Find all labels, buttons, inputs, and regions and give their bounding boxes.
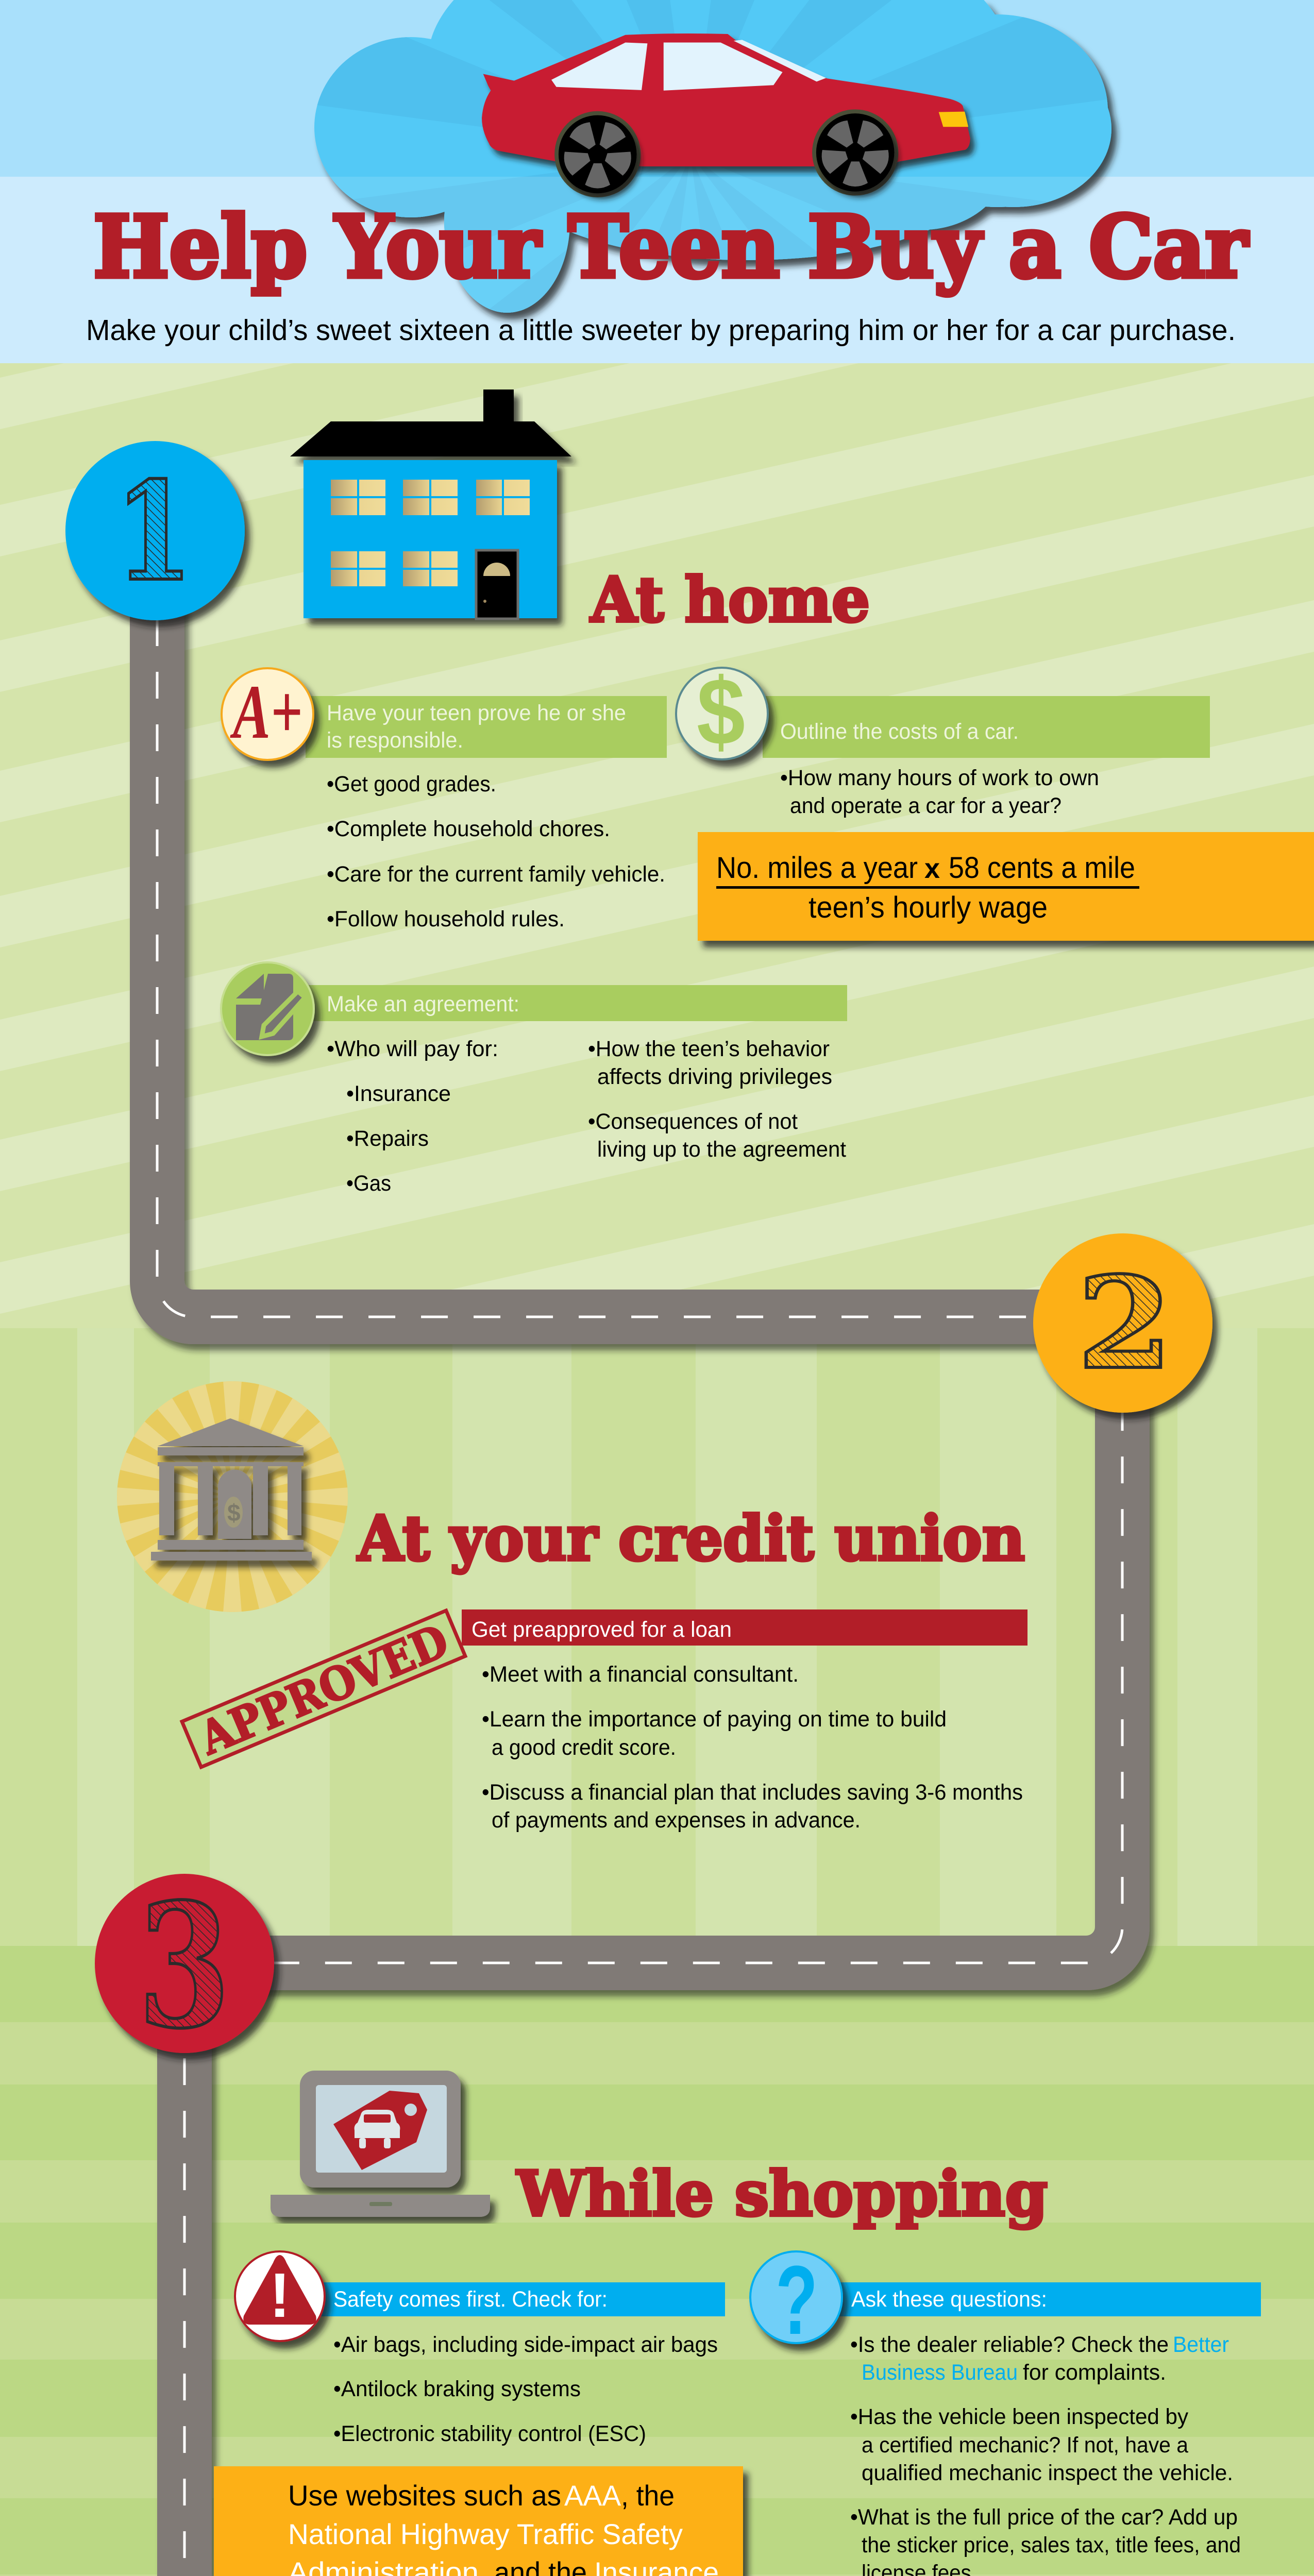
icon: dollar: $ <box>697 659 745 765</box>
bullets <box>482 1662 1023 1833</box>
callout: cost formula: x <box>924 853 940 884</box>
subtitle: Make your child’s sweet sixteen a little sweeter by preparing him or her for a car purchase. <box>86 314 1236 347</box>
icon: question mark: ? <box>776 2246 818 2355</box>
icon: warning <box>235 2251 325 2341</box>
icon: bank with sun rays: $ <box>227 1499 241 1526</box>
bar text: Make an agreement: <box>327 992 519 1016</box>
background: horizontal green stripes <box>0 1946 1314 2576</box>
step 2 badge <box>1033 1233 1212 1413</box>
bullets: a good credit score. <box>492 1735 676 1760</box>
heading: At home: At home <box>590 564 870 636</box>
bullets: •Has the vehicle been inspected by <box>850 2404 1188 2429</box>
icon: dollar <box>676 659 768 765</box>
heading: While shopping: While shopping <box>516 2158 1048 2230</box>
bullet: •How many hours of work to own <box>780 766 1099 790</box>
road <box>157 567 1314 2576</box>
step 3 badge: 3 <box>138 1866 230 2066</box>
icon: question mark <box>750 2246 842 2355</box>
callout: cost formula: No. miles a year <box>716 851 918 885</box>
heading: At your credit union: At your credit union <box>357 1502 1025 1575</box>
bullets: •Follow household rules. <box>327 907 565 931</box>
panel: make an agreement <box>221 962 847 1196</box>
icon: A+ grade: A+ <box>230 669 302 755</box>
bullets <box>327 772 665 931</box>
icon: bank with sun rays <box>117 1381 348 1612</box>
panel: prove responsibility <box>222 668 667 931</box>
background: sky header <box>0 0 1314 363</box>
bullets: behavior: •Consequences of not <box>588 1109 798 1134</box>
blue bar: safety <box>318 2282 725 2316</box>
bullets: a certified mechanic? If not, have a <box>862 2433 1188 2458</box>
callout: websites: , the <box>621 2479 675 2512</box>
icon: laptop with price tag <box>271 2071 490 2217</box>
callout: cost formula: teen’s hourly wage <box>808 891 1048 924</box>
bullets <box>333 2332 718 2446</box>
bar text: Get preapproved for a loan <box>471 1617 732 1642</box>
callout: cost formula: 58 cents a mile <box>949 851 1135 885</box>
bullets: the sticker price, sales tax, title fees, and <box>862 2533 1241 2557</box>
red bar <box>462 1609 1027 1646</box>
step 1 badge: 1 <box>115 452 193 612</box>
stamp: approved: APPROVED <box>191 1614 456 1765</box>
cloud with sun rays <box>314 0 1121 325</box>
bullets: •Is the dealer reliable? Check the <box>850 2332 1169 2357</box>
icon: warning: ! <box>269 2260 290 2330</box>
bar text: Safety comes first. Check for: <box>333 2287 608 2312</box>
bullets: of payments and expenses in advance. <box>492 1808 861 1833</box>
bullet: and operate a car for a year? <box>790 793 1062 818</box>
bullets: •Care for the current family vehicle. <box>327 862 665 887</box>
step 2 badge: 2 <box>1077 1249 1173 1397</box>
bullets: •Learn the importance of paying on time to build <box>482 1707 947 1732</box>
panel: prove responsibility: is responsible. <box>327 728 463 753</box>
background: diagonal green stripes <box>0 363 1314 1328</box>
green bar: agreement <box>306 985 847 1021</box>
bullets: •Discuss a financial plan that includes saving 3-6 months <box>482 1780 1023 1805</box>
bar text: Ask these questions: <box>851 2287 1047 2312</box>
panel: questions <box>750 2246 1261 2576</box>
step 3 badge <box>95 1866 274 2066</box>
bullet <box>780 766 1099 818</box>
panel: safety <box>235 2251 725 2446</box>
bullets: •What is the full price of the car? Add up <box>850 2505 1238 2530</box>
bar text: Have your teen prove he or she <box>327 701 626 725</box>
bullets: •Meet with a financial consultant. <box>482 1662 799 1687</box>
title: Help Your Teen Buy a Car <box>93 197 1249 297</box>
icon: document and pencil <box>221 962 314 1055</box>
bullets: •Antilock braking systems <box>333 2377 581 2401</box>
callout: websites: AAA <box>564 2479 621 2512</box>
bullets <box>850 2332 1241 2576</box>
bullets: behavior: affects driving privileges <box>597 1064 832 1089</box>
green bar: responsible <box>306 696 667 758</box>
callout: cost formula <box>698 832 1314 941</box>
bullets: behavior: living up to the agreement <box>597 1137 846 1162</box>
bullets: who pays: •Repairs <box>346 1126 429 1151</box>
car: header <box>482 33 970 197</box>
callout: websites: National Highway Traffic Safety <box>288 2518 683 2550</box>
bullets: qualified mechanic inspect the vehicle. <box>862 2461 1233 2485</box>
callout: websites <box>214 2466 743 2576</box>
bullets: who pays: •Gas <box>346 1171 391 1196</box>
bullets: Business Bureau <box>862 2360 1018 2385</box>
callout: websites: Use websites such as <box>288 2479 561 2512</box>
bullets: •Electronic stability control (ESC) <box>333 2421 646 2446</box>
bullets: •Air bags, including side-impact air bags <box>333 2332 718 2357</box>
background: vertical green stripes <box>0 1328 1314 1946</box>
bullets: who pays: •Who will pay for: <box>327 1037 498 1061</box>
bar text: Outline the costs of a car. <box>780 719 1019 744</box>
panel: preapproved loan <box>462 1609 1027 1833</box>
bullets: who pays: •Insurance <box>346 1081 451 1106</box>
bullets: for complaints. <box>1023 2360 1166 2385</box>
blue bar: questions <box>838 2282 1261 2316</box>
panel: costs of a car <box>676 659 1314 941</box>
bullets: •Get good grades. <box>327 772 496 796</box>
bullets: Better <box>1173 2332 1229 2357</box>
green bar: costs <box>763 696 1210 758</box>
icon: house <box>290 389 571 619</box>
step 1 badge <box>65 441 245 620</box>
bullets: •Complete household chores. <box>327 817 610 841</box>
bullets: behavior: •How the teen’s behavior <box>588 1037 830 1061</box>
bullets: behavior <box>588 1037 846 1162</box>
bullets: who pays <box>327 1037 498 1196</box>
